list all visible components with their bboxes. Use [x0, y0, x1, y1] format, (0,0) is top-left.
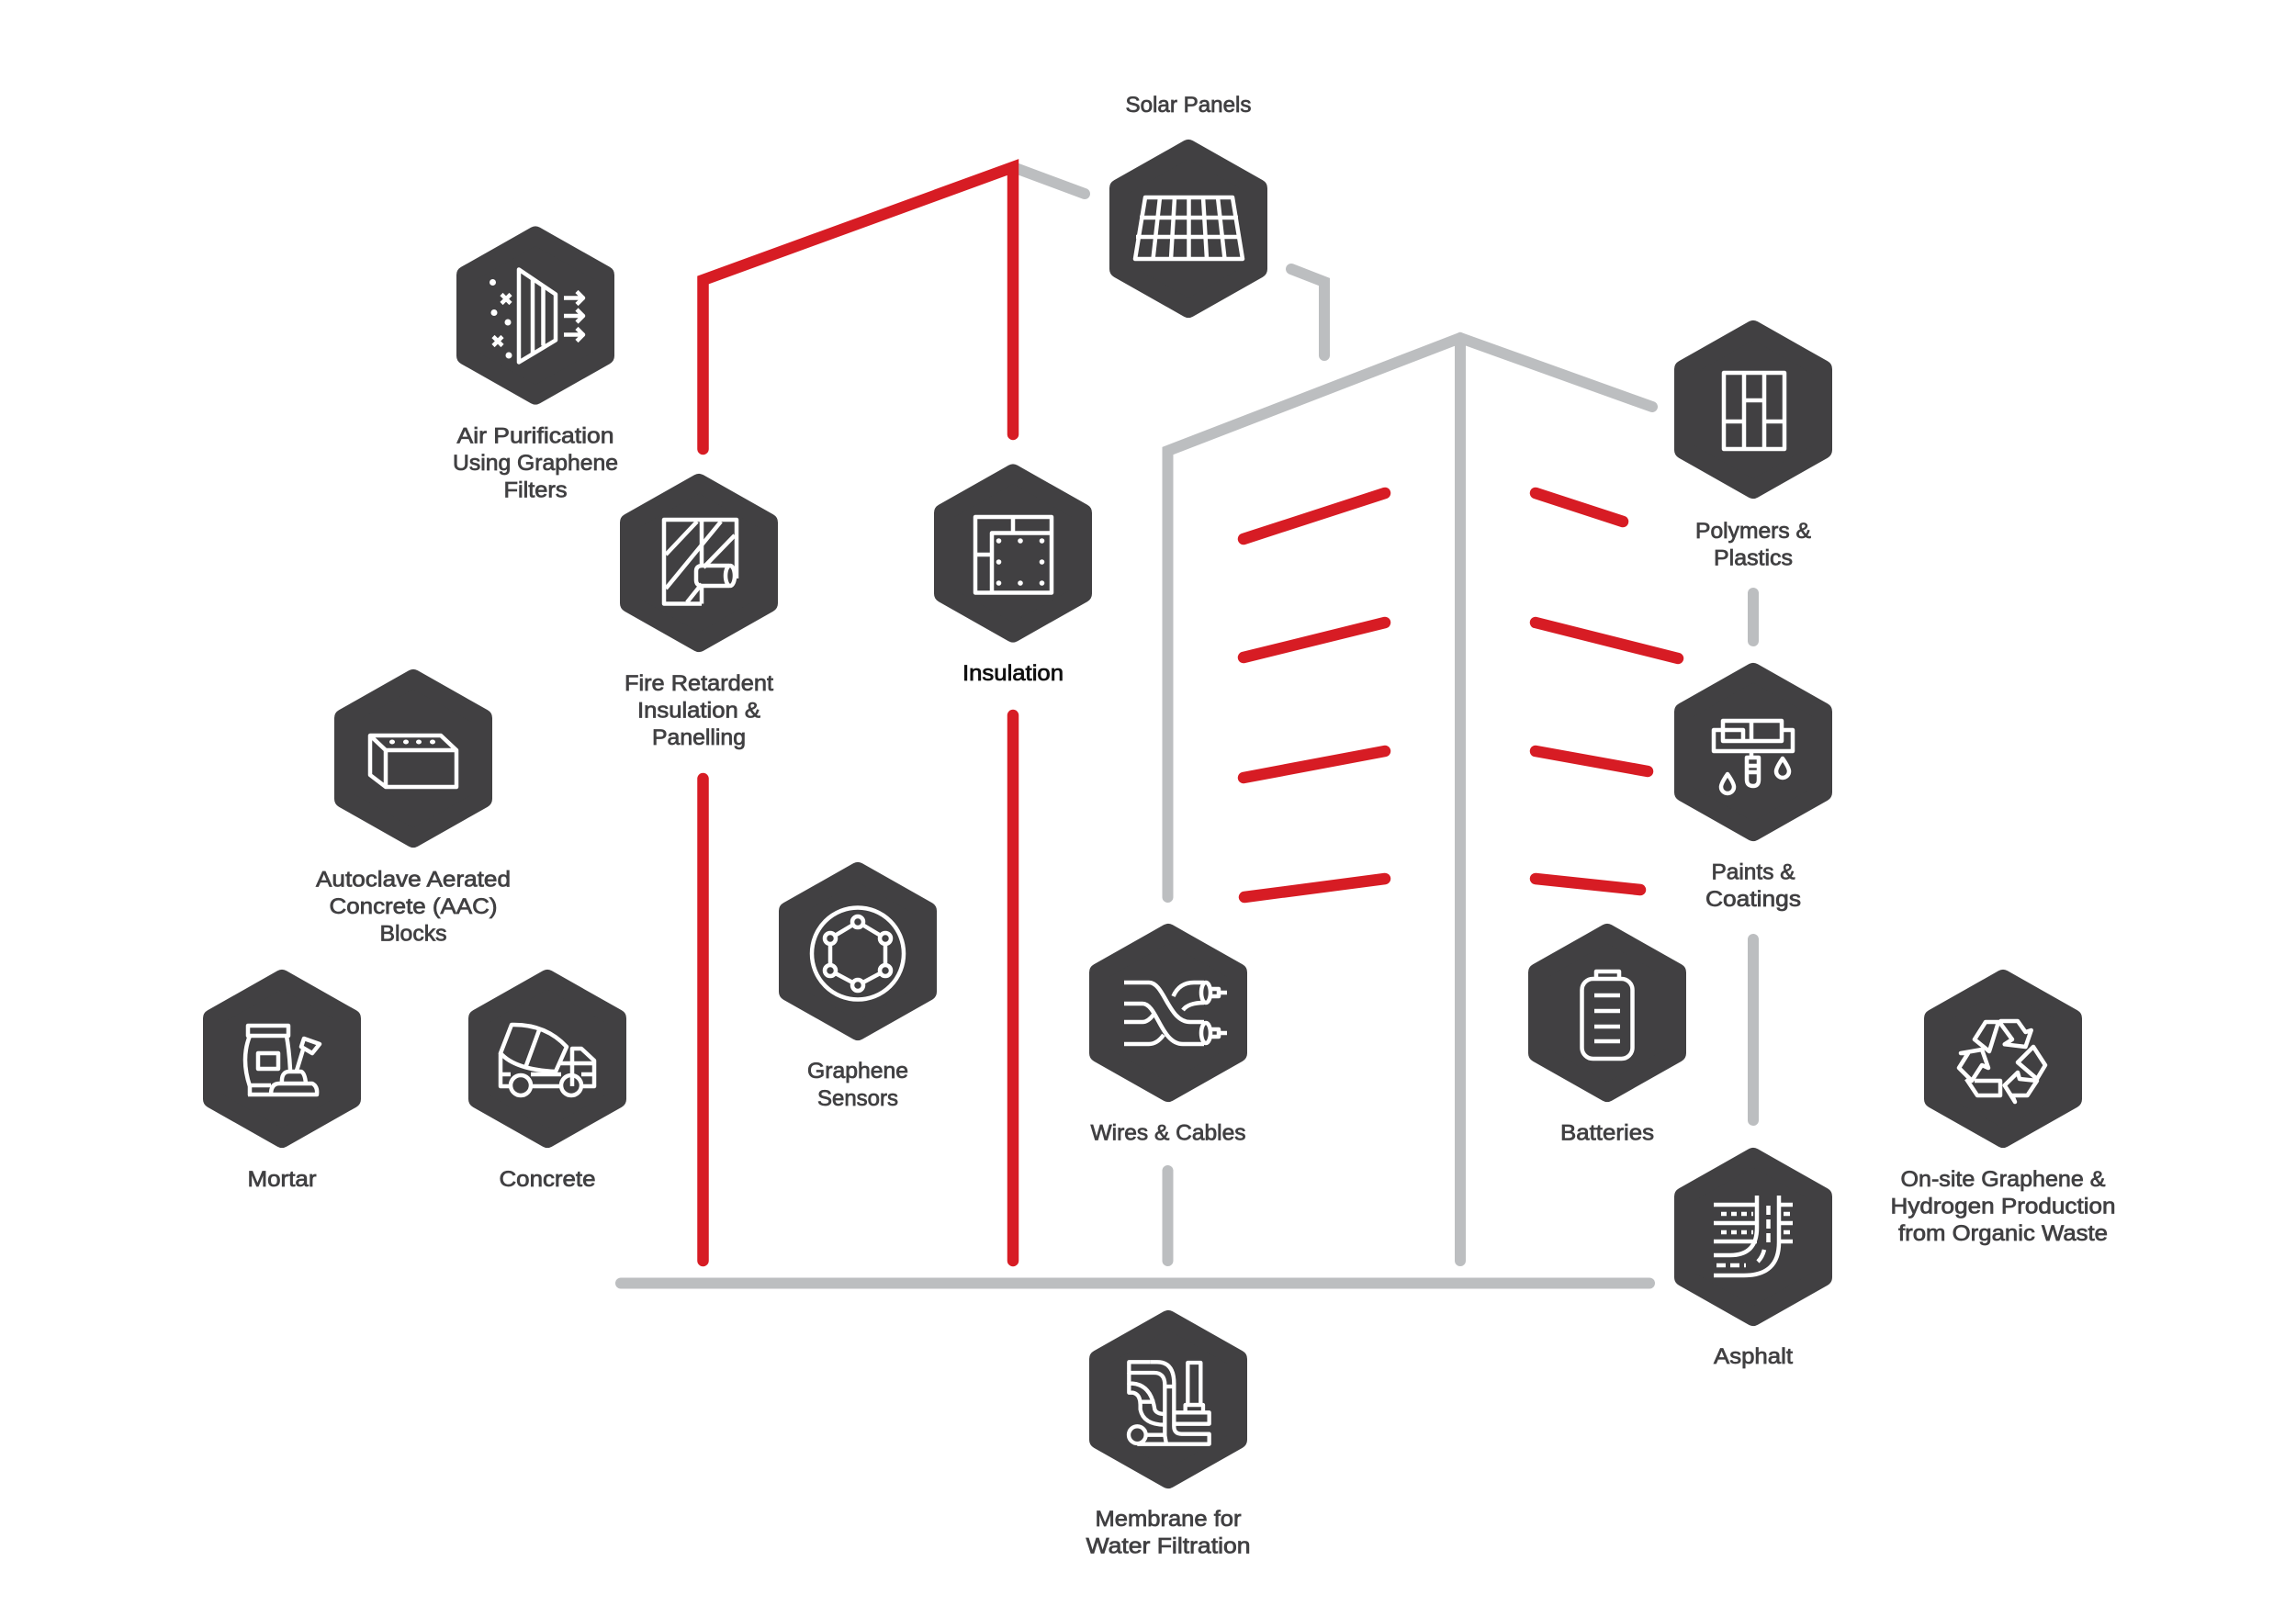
node: Wires and Cables	[1091, 933, 1245, 1146]
icon: air filter	[466, 235, 605, 395]
node: Insulation	[943, 474, 1083, 686]
icon: concrete mixer truck	[478, 979, 617, 1139]
node: Graphene Sensors	[788, 871, 928, 1111]
label: Polymers and Plastics: Plastics	[1714, 545, 1793, 571]
node: Batteries	[1537, 933, 1677, 1146]
icon: graphene ring sensor	[788, 871, 928, 1031]
node: Polymers and Plastics	[1683, 330, 1823, 571]
label: Wires and Cables: Wires & Cables	[1091, 1120, 1245, 1146]
label: Concrete: Concrete	[500, 1167, 595, 1192]
label: Air Purification: Filters	[503, 477, 568, 503]
node: Concrete	[478, 979, 617, 1192]
label: Air Purification	[453, 424, 618, 503]
label: Polymers and Plastics: Polymers &	[1695, 519, 1811, 544]
label: Air Purification: Air Purification	[457, 424, 613, 448]
node: On-site Graphene and Hydrogen Production	[1890, 979, 2116, 1246]
label: Membrane for Water Filtration: Membrane for	[1095, 1507, 1242, 1532]
node: Air Purification	[453, 235, 618, 503]
label: Fire Retardent	[625, 671, 773, 750]
label: Air Purification: Using Graphene	[453, 451, 618, 476]
icon: recycling arrows	[1933, 979, 2073, 1139]
node: Paints and Coatings	[1683, 672, 1823, 912]
icon: paint roller	[1683, 672, 1823, 832]
label: AAC Blocks: Blocks	[380, 922, 446, 946]
label: Fire Retardent: Insulation &	[637, 698, 760, 724]
node: AAC Blocks	[316, 679, 511, 946]
label: Paints and Coatings	[1705, 859, 1801, 912]
label: On-site Graphene and Hydrogen Production: from Organic Waste	[1898, 1221, 2108, 1246]
label: AAC Blocks: Autoclave Aerated	[316, 867, 511, 893]
icon: twisted cables	[1098, 933, 1238, 1093]
grey building outline lines	[621, 167, 1753, 1284]
node: Membrane for Water Filtration	[1086, 1319, 1251, 1559]
icon: insulation board	[943, 474, 1083, 634]
label: Fire Retardent: Panelling	[652, 725, 746, 750]
node: Fire Retardent	[625, 483, 773, 750]
icon: battery	[1537, 933, 1677, 1093]
label: Polymers and Plastics	[1695, 519, 1811, 571]
icon: mortar bag and shovel	[212, 979, 352, 1139]
node: Solar Panels	[1119, 93, 1258, 309]
label: On-site Graphene and Hydrogen Production: On-site Graphene &	[1901, 1167, 2105, 1192]
label: Batteries: Batteries	[1560, 1120, 1654, 1146]
label: Graphene Sensors: Graphene	[807, 1059, 908, 1084]
label: Graphene Sensors	[807, 1059, 908, 1111]
red floor lines	[1244, 493, 1678, 897]
label: Paints and Coatings: Paints &	[1712, 859, 1795, 885]
label: AAC Blocks	[316, 867, 511, 946]
icon: filtration membrane pipes	[1098, 1319, 1238, 1479]
red roof and wall lines	[703, 167, 1013, 1261]
label: Fire Retardent: Fire Retardent	[625, 671, 773, 696]
node: Asphalt	[1683, 1157, 1823, 1369]
label: Asphalt: Asphalt	[1714, 1344, 1793, 1369]
label: Paints and Coatings: Coatings	[1705, 887, 1801, 912]
label: On-site Graphene and Hydrogen Production	[1890, 1167, 2116, 1246]
node: Mortar	[212, 979, 352, 1192]
icon: solar panel	[1119, 149, 1258, 309]
icon: fire retardant panel	[629, 483, 769, 643]
label: Membrane for Water Filtration	[1086, 1507, 1251, 1559]
icon: aerated concrete block	[343, 679, 483, 838]
label: Solar Panels: Solar Panels	[1126, 93, 1251, 118]
icon: polymer tiles	[1683, 330, 1823, 489]
icon: asphalt road	[1683, 1157, 1823, 1317]
label: Membrane for Water Filtration: Water Filtration	[1086, 1533, 1251, 1559]
label: On-site Graphene and Hydrogen Production: Hydrogen Production	[1890, 1194, 2116, 1219]
label: Insulation: Insulation	[962, 661, 1064, 686]
label: AAC Blocks: Concrete (AAC)	[329, 894, 498, 919]
label: Mortar: Mortar	[248, 1167, 317, 1192]
label: Graphene Sensors: Sensors	[817, 1086, 898, 1111]
